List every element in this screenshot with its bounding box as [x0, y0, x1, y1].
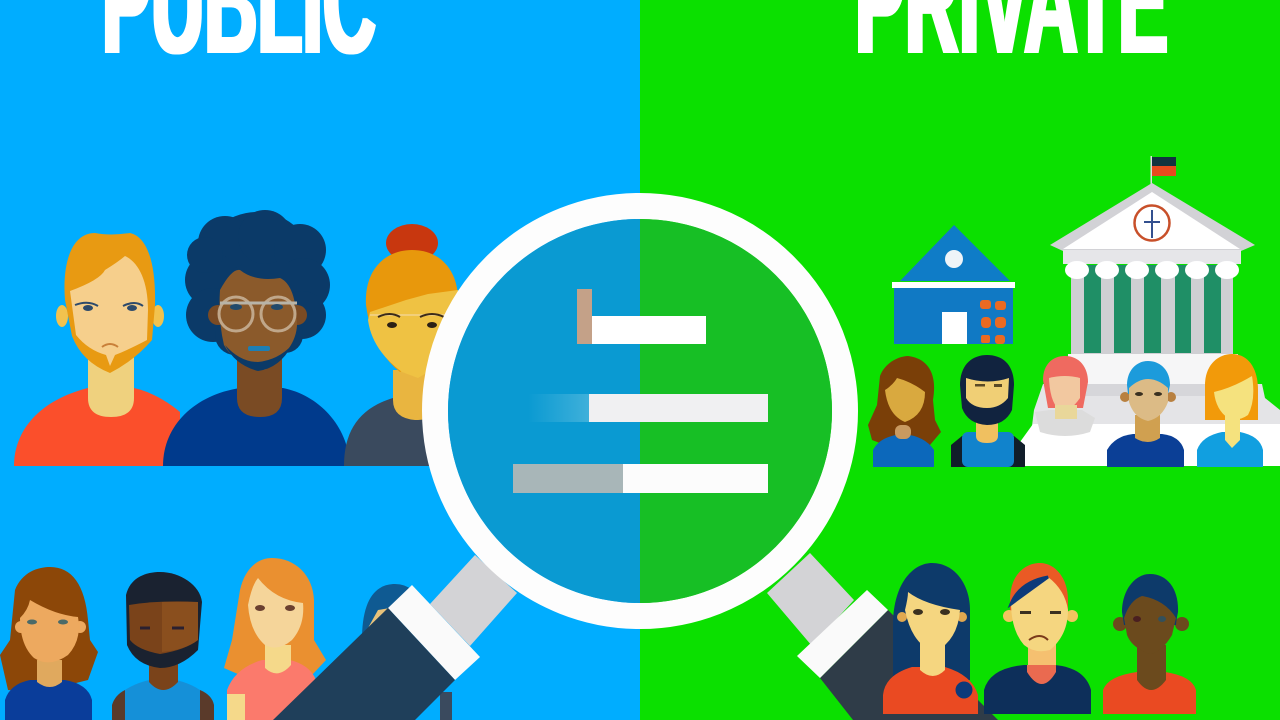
person: bearded dark-skin man, bottom left: [112, 572, 214, 720]
bar: bottom: [513, 464, 768, 493]
person: woman with bun: [344, 224, 458, 466]
person: orange-hair woman: [1197, 354, 1263, 467]
person: dark-skin man, bottom right: [1103, 574, 1196, 714]
magnifier lens with comparison bars: [435, 206, 845, 616]
person: afro man with glasses: [163, 210, 350, 466]
person: red shirt man with goatee: [14, 233, 180, 466]
magnifier handle: left: [273, 555, 517, 720]
person: red and blue hair man, bottom right: [984, 563, 1091, 714]
person: red-hair woman in front of steps: [1035, 356, 1095, 436]
person: blue-hair man: [1107, 361, 1184, 467]
person: brown-hair woman, bottom left: [0, 567, 98, 720]
person: long dark hair woman, bottom right: [883, 563, 978, 714]
bar: middle: [528, 394, 768, 422]
magnifier handle: right: [767, 553, 998, 720]
person: partly hidden figure behind handle: [362, 584, 452, 720]
person: bearded man, green panel: [951, 355, 1025, 467]
person: ginger long-hair woman, bottom left: [224, 558, 326, 720]
panel: private background: [640, 0, 1280, 720]
icon: columned government building: [1020, 156, 1280, 466]
panel: public background: [0, 0, 640, 720]
bar: top: [577, 289, 706, 344]
person: brown wavy-hair woman, green panel: [868, 356, 941, 467]
icon: blue school house: [892, 225, 1015, 344]
